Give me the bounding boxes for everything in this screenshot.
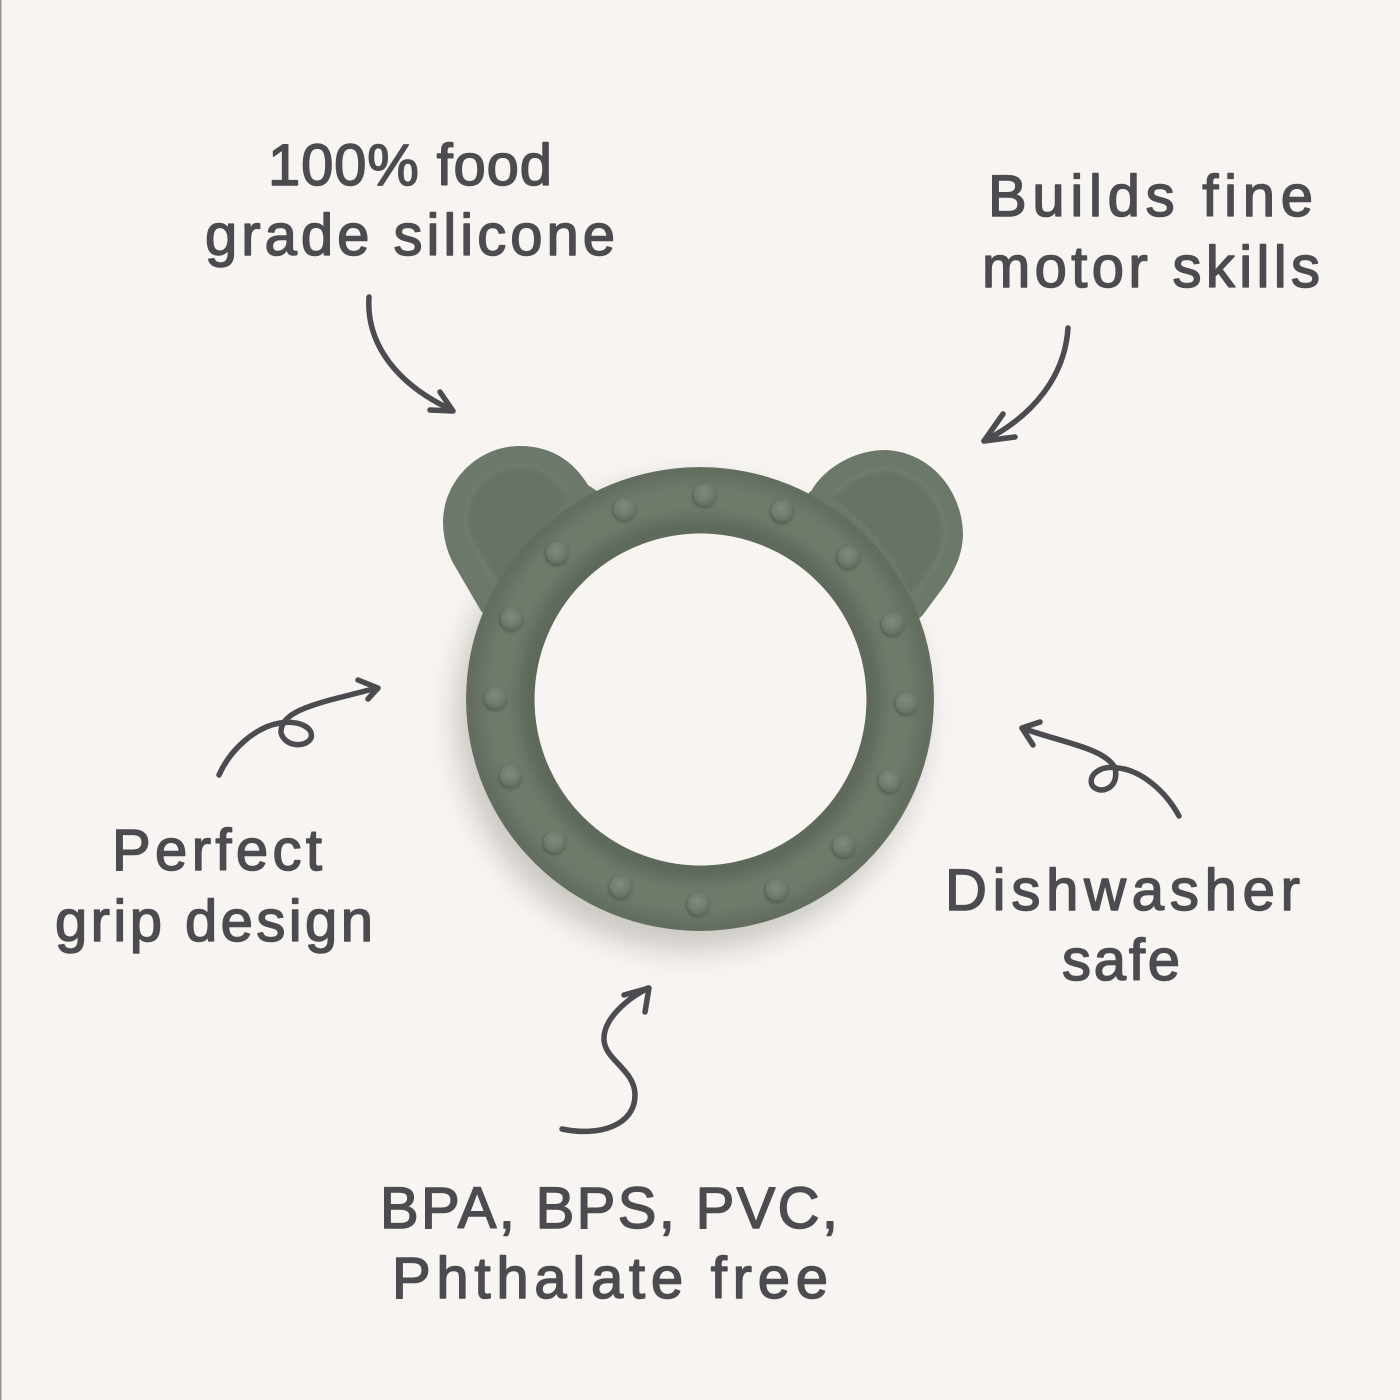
arrow: to teether top left <box>369 297 453 411</box>
teether soft drop shadow <box>490 516 890 916</box>
callout: BPA, BPS, PVC, phthalate free: BPA, BPS, PVC, <box>380 1176 838 1241</box>
callout: builds fine motor skills: Builds fine <box>988 164 1313 229</box>
arrow: looped, to teether right <box>1022 722 1179 816</box>
callout: dishwasher safe <box>945 858 1300 993</box>
callout: builds fine motor skills: motor skills <box>982 235 1320 300</box>
arrow: wavy, up to teether bottom <box>562 988 649 1131</box>
callout: BPA, BPS, PVC, phthalate free <box>380 1176 838 1311</box>
callout: builds fine motor skills <box>982 164 1320 300</box>
callout: 100% food grade silicone: 100% food <box>268 133 552 198</box>
callout: 100% food grade silicone <box>205 133 615 268</box>
callout: 100% food grade silicone: grade silicone <box>205 203 615 268</box>
callout: dishwasher safe: Dishwasher <box>945 858 1300 923</box>
arrow: looped, to teether left <box>219 680 378 775</box>
callout: perfect grip design: Perfect <box>112 818 322 883</box>
callout: perfect grip design: grip design <box>55 889 373 954</box>
callout: BPA, BPS, PVC, phthalate free: Phthalate free <box>392 1246 828 1311</box>
callout: dishwasher safe: safe <box>1062 928 1180 993</box>
product: bear-shaped silicone teether <box>443 446 963 931</box>
arrow: to teether top right <box>984 328 1068 441</box>
callout: perfect grip design <box>55 818 373 954</box>
ring dots <box>484 484 918 916</box>
left ear <box>443 446 640 640</box>
right ear <box>780 450 963 650</box>
ring body <box>466 467 934 931</box>
